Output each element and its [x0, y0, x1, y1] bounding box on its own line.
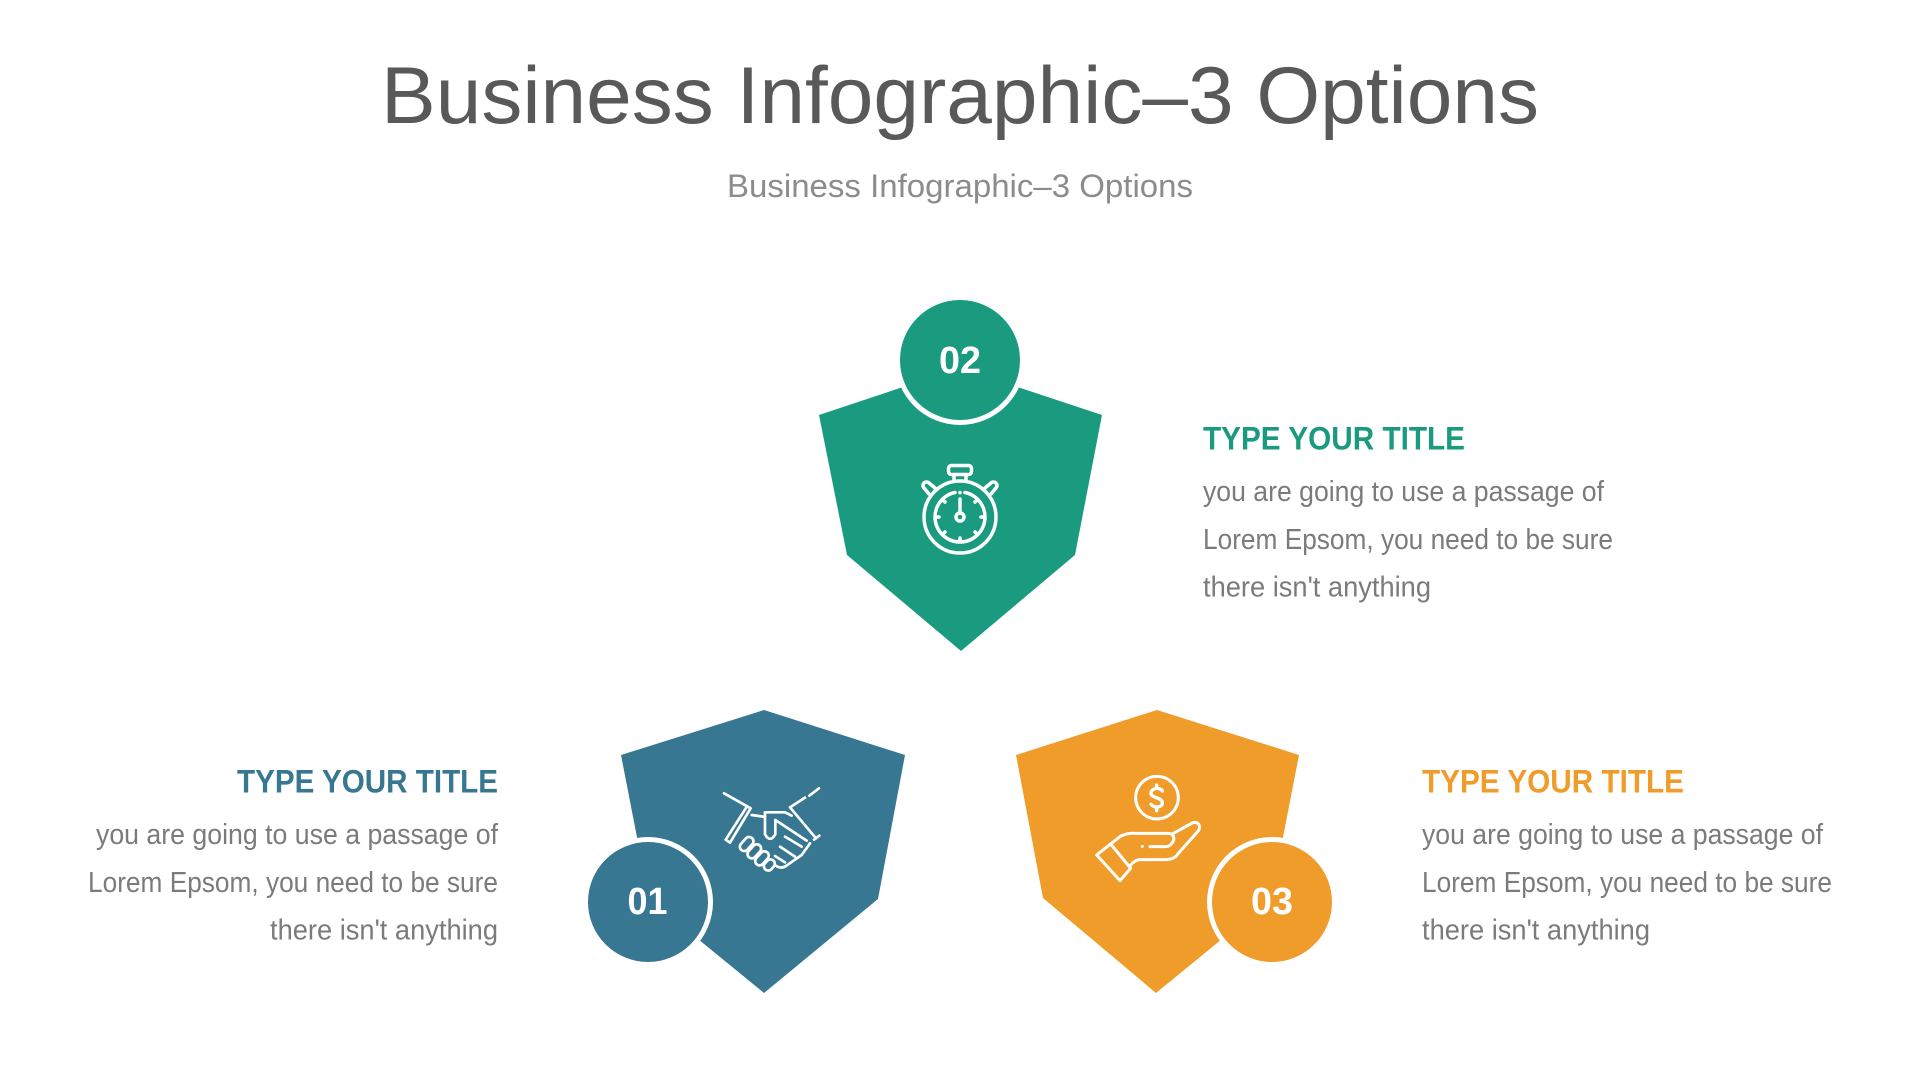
body: option 02	[1203, 476, 1613, 604]
heading: option 02: TYPE YOUR TITLE	[1203, 420, 1465, 456]
icon: stopwatch	[923, 466, 997, 553]
panel: option 02 text	[1203, 420, 1613, 604]
heading: option 01: TYPE YOUR TITLE	[237, 764, 498, 800]
badge: 03: 03	[1251, 881, 1293, 923]
panel: option 03 text	[1422, 764, 1832, 946]
badge: 02	[895, 295, 1025, 425]
body: option 01: you are going to use a passage of	[96, 819, 498, 851]
icon: hand holding coin	[1097, 776, 1200, 881]
body: option 03	[1422, 819, 1832, 946]
shield: orange	[1016, 710, 1299, 993]
title: Business Infographic–3 Options	[381, 51, 1539, 141]
shield: blue	[621, 710, 905, 993]
body: option 03: Lorem Epsom, you need to be sure	[1422, 867, 1832, 899]
badge: 03	[1207, 837, 1337, 967]
body: option 01	[88, 819, 498, 946]
badge: 01	[583, 837, 713, 967]
heading: option 03: TYPE YOUR TITLE	[1422, 764, 1684, 800]
panel: option 01 shield	[583, 710, 905, 993]
body: option 02: Lorem Epsom, you need to be sure	[1203, 524, 1613, 556]
badge: 01: 01	[628, 881, 668, 923]
body: option 03: you are going to use a passage of	[1422, 819, 1823, 851]
panel: option 03 shield	[1016, 710, 1337, 993]
body: option 01: Lorem Epsom, you need to be sure	[88, 867, 498, 899]
body: option 02: you are going to use a passage of	[1203, 476, 1604, 508]
body: option 03: there isn't anything	[1422, 914, 1650, 946]
icon: handshake	[724, 788, 819, 872]
panel: option 02 shield	[819, 295, 1102, 651]
badge: 02: 02	[939, 340, 981, 382]
body: option 02: there isn't anything	[1203, 572, 1431, 604]
panel: option 01 text	[88, 764, 498, 946]
body: option 01: there isn't anything	[270, 914, 498, 946]
subtitle: Business Infographic–3 Options	[727, 168, 1193, 204]
shield: green	[819, 368, 1102, 651]
